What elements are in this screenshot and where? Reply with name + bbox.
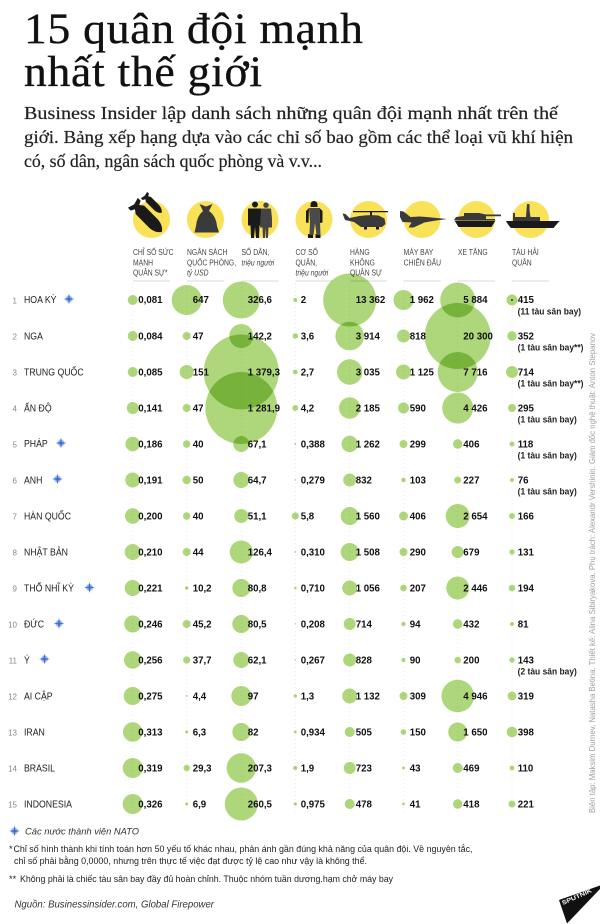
row 1: Hoa Kỳ: 647 <box>193 295 209 306</box>
column headers <box>133 246 539 278</box>
row 12: Ai Cập: 319 <box>518 692 534 702</box>
row 5: Pháp: 299 <box>410 440 426 450</box>
row 12: Ai Cập: 12 <box>8 692 18 702</box>
row 12: Ai Cập: 0,275 <box>138 692 163 702</box>
column headers: NGÂN SÁCH <box>187 247 227 257</box>
row 14: Brasil: 110 <box>518 764 533 774</box>
row 12: Ai Cập: 1,3 <box>301 692 315 702</box>
row 6: Anh: (1 tàu sân bay) <box>518 486 577 497</box>
column headers: QUỐC PHÒNG, <box>187 257 236 268</box>
row 11: Ý: 37,7 <box>193 656 212 666</box>
row 1: Hoa Kỳ: HOA KỲ <box>24 294 57 306</box>
row 11: Ý: 11 <box>9 656 18 666</box>
column headers: MẠNH <box>133 258 153 268</box>
row 4: Ấn Độ: 4,2 <box>301 404 314 414</box>
row 9: Thổ Nhĩ Kỳ: 194 <box>518 584 534 594</box>
row 8: Nhật Bản: 0,210 <box>138 548 163 558</box>
row 12: Ai Cập: 309 <box>410 692 426 702</box>
row 10: Đức: 10 <box>8 620 18 630</box>
column headers: triệu người <box>296 268 328 278</box>
row 10: Đức: 0,246 <box>138 620 163 630</box>
row 1: Hoa Kỳ: 0,081 <box>138 295 163 306</box>
row 12: Ai Cập: 1 132 <box>356 692 380 702</box>
column headers: HÀNG <box>350 247 370 257</box>
logo: Sputnik <box>559 886 600 924</box>
row 2: Nga: 818 <box>410 332 426 342</box>
row 14: Brasil <box>8 753 533 783</box>
row 15: Indonesia: 260,5 <box>248 800 273 810</box>
row 2: Nga: 20 300 <box>463 332 493 342</box>
footnote 1: chỉ số phải bằng 0,0000, nhưng trên thực tế việc đạt được tỷ lệ cao như vậy là không thể. <box>14 856 367 866</box>
row 6: Anh: 227 <box>463 476 479 486</box>
row 6: Anh: 103 <box>410 476 426 486</box>
row 7: Hàn Quốc: 406 <box>410 512 426 522</box>
row 3: Trung Quốc: 1 379,3 <box>248 368 281 378</box>
row 14: Brasil: 469 <box>463 764 480 774</box>
column headers: QUÂN SỰ* <box>133 268 168 278</box>
row 7: Hàn Quốc: HÀN QUỐC <box>24 510 71 523</box>
row 3: Trung Quốc: TRUNG QUỐC <box>24 366 84 379</box>
row 13: Iran: 0,934 <box>301 728 326 738</box>
row 7: Hàn Quốc: 51,1 <box>248 512 267 522</box>
row 1: Hoa Kỳ: 415 <box>518 295 534 306</box>
row 6: Anh: 0,279 <box>301 476 326 486</box>
row 8: Nhật Bản: 679 <box>463 548 480 558</box>
column headers: CƠ SỐ <box>296 246 318 257</box>
row 10: Đức: 0,208 <box>301 620 326 630</box>
row 1: Hoa Kỳ: (11 tàu sân bay) <box>518 306 581 317</box>
row 4: Ấn Độ: 4 <box>13 404 18 414</box>
row 5: Pháp: 1 262 <box>356 440 380 450</box>
row 10: Đức: ĐỨC <box>24 619 44 631</box>
column headers: CHIẾN ĐẤU <box>404 257 441 268</box>
row 11: Ý: 0,267 <box>301 656 325 666</box>
row 11: Ý: 62,1 <box>248 656 267 666</box>
row 13: Iran: 398 <box>518 728 534 738</box>
row 10: Đức: 80,5 <box>248 620 267 630</box>
row 13: Iran <box>8 722 534 742</box>
row 2: Nga: 47 <box>193 332 203 342</box>
source: Nguồn: Businessinsider.com, Global Firepower <box>14 898 214 910</box>
row 7: Hàn Quốc: 166 <box>518 512 534 522</box>
column headers: KHÔNG <box>350 258 375 268</box>
row 15: Indonesia: 0,326 <box>138 800 163 810</box>
logo: Sputnik: SPUTNIK <box>561 888 594 907</box>
row 6: Anh: 64,7 <box>248 476 267 486</box>
row 9: Thổ Nhĩ Kỳ: 207 <box>410 584 426 594</box>
footnote 1: Chỉ số hình thành khi tính toán hơn 50 yếu tố khác nhau, phản ánh gần đúng khả năng của quân đội. Về nguyên tắc, <box>14 844 472 854</box>
row 5: Pháp: 0,388 <box>301 440 326 450</box>
intro text: có, số dân, ngân sách quốc phòng và v.v... <box>24 151 322 171</box>
row 7: Hàn Quốc: 5,8 <box>301 512 315 522</box>
row 3: Trung Quốc: 151 <box>193 368 209 378</box>
credits: Biên tập: Maksim Durnev, Natasha Betina. Thiết kế: Alina Sibiryakova. Phụ trách: Alexandr Vershinin. Giám đốc nghệ thuật: Anton Stepanov <box>587 332 597 813</box>
row 9: Thổ Nhĩ Kỳ: 0,710 <box>301 584 325 594</box>
row 14: Brasil: 0,319 <box>138 764 163 774</box>
row 11: Ý: 828 <box>356 656 372 666</box>
row 9: Thổ Nhĩ Kỳ: 2 446 <box>463 584 488 594</box>
row 10: Đức: 94 <box>410 620 421 630</box>
row 11: Ý: 143 <box>518 656 534 666</box>
row 11: Ý: 200 <box>463 656 479 666</box>
row 3: Trung Quốc: 714 <box>518 368 534 378</box>
row 14: Brasil: 1,9 <box>301 764 315 774</box>
row 15: Indonesia: 0,975 <box>301 800 326 810</box>
row 3: Trung Quốc: 3 035 <box>356 368 381 378</box>
row 15: Indonesia: 15 <box>8 800 18 810</box>
row 6: Anh: 6 <box>13 476 18 486</box>
row 12: Ai Cập <box>8 680 534 712</box>
row 13: Iran: 505 <box>356 728 372 738</box>
row 13: Iran: 13 <box>8 728 18 738</box>
footnote 2: Không phải là chiếc tàu sân bay đầy đủ hoàn chỉnh. Thuộc nhóm tuần dương.hạm chở máy bay <box>20 874 393 884</box>
icon: soldier <box>296 201 332 238</box>
row 1: Hoa Kỳ: 1 962 <box>410 295 434 306</box>
row 2: Nga: 142,2 <box>248 332 272 342</box>
row 6: Anh: 50 <box>193 476 203 486</box>
column headers: tỷ USD <box>187 268 209 278</box>
title: 15 quân đội mạnh <box>24 5 364 53</box>
row 7: Hàn Quốc <box>13 504 534 528</box>
row 6: Anh: 832 <box>356 476 372 486</box>
row 10: Đức: 45,2 <box>193 620 212 630</box>
row 15: Indonesia: 418 <box>463 800 480 810</box>
column headers: QUÂN, <box>296 258 317 268</box>
row 4: Ấn Độ: 4 426 <box>463 404 488 414</box>
row 15: Indonesia: 41 <box>410 800 421 810</box>
row 14: Brasil: 14 <box>8 764 18 774</box>
row 5: Pháp: 406 <box>463 440 480 450</box>
row 8: Nhật Bản: 8 <box>13 548 18 558</box>
row 1: Hoa Kỳ: 326,6 <box>248 295 273 306</box>
row 2: Nga: 3 914 <box>356 332 381 342</box>
icon: helicopter <box>342 201 388 238</box>
icon: money bag <box>187 201 224 238</box>
intro text: giới. Bảng xếp hạng dựa vào các chỉ số bao gồm các thể loại vũ khí hiện <box>24 127 573 147</box>
row 8: Nhật Bản <box>13 540 534 564</box>
row 11: Ý: Ý <box>24 655 30 667</box>
row 2: Nga: NGA <box>24 331 43 343</box>
row 13: Iran: 6,3 <box>193 728 207 738</box>
row 5: Pháp: (1 tàu sân bay) <box>518 450 577 461</box>
column headers: SỐ DÂN, <box>241 246 269 257</box>
row 2: Nga: (1 tàu sân bay**) <box>518 342 583 353</box>
row 14: Brasil: 43 <box>410 764 421 774</box>
icon: jet <box>400 201 447 238</box>
icon: ship <box>506 201 560 238</box>
row 3: Trung Quốc: 7 716 <box>463 368 488 378</box>
row 13: Iran: IRAN <box>24 727 45 739</box>
row 10: Đức: 714 <box>356 620 372 630</box>
row 5: Pháp: 40 <box>193 440 203 450</box>
row 11: Ý: 90 <box>410 656 420 666</box>
icon: tank <box>454 201 501 238</box>
row 7: Hàn Quốc: 1 560 <box>356 512 380 522</box>
footnote 1: * <box>9 844 13 854</box>
row 3: Trung Quốc: 2,7 <box>301 368 314 378</box>
row 13: Iran: 1 650 <box>463 728 488 738</box>
column headers: QUÂN <box>512 258 532 268</box>
row 8: Nhật Bản: 44 <box>193 548 204 558</box>
row 6: Anh: ANH <box>24 475 42 487</box>
column headers: MÁY BAY <box>404 247 433 257</box>
row 15: Indonesia: 478 <box>356 800 372 810</box>
row 6: Anh: 0,191 <box>138 476 163 486</box>
row 3: Trung Quốc: 0,085 <box>138 368 163 378</box>
row 9: Thổ Nhĩ Kỳ: 9 <box>13 584 18 594</box>
column headers: QUÂN SỰ <box>350 268 382 278</box>
intro text <box>24 103 573 171</box>
row 1: Hoa Kỳ: 2 <box>301 295 306 306</box>
row 8: Nhật Bản: 0,310 <box>301 548 325 558</box>
row 4: Ấn Độ: 590 <box>410 404 426 414</box>
row 10: Đức: 432 <box>463 620 479 630</box>
row 4: Ấn Độ: 47 <box>193 404 203 414</box>
row 6: Anh: 76 <box>518 476 529 486</box>
row 7: Hàn Quốc: 0,200 <box>138 512 163 522</box>
row 9: Thổ Nhĩ Kỳ: 80,8 <box>248 584 267 594</box>
row 1: Hoa Kỳ <box>13 274 581 326</box>
row 8: Nhật Bản: 290 <box>410 548 426 558</box>
icon: bombs <box>128 192 170 238</box>
footnote 1 <box>9 844 472 866</box>
row 8: Nhật Bản: 131 <box>518 548 534 558</box>
row 8: Nhật Bản: 1 508 <box>356 548 381 558</box>
row 5: Pháp <box>13 436 577 461</box>
row 11: Ý: 0,256 <box>138 656 163 666</box>
intro text: Business Insider lập danh sách những quân đội mạnh nhất trên thế <box>24 103 559 123</box>
row 2: Nga: 0,084 <box>138 332 163 342</box>
row 14: Brasil: 723 <box>356 764 372 774</box>
row 3: Trung Quốc <box>13 334 583 410</box>
row 9: Thổ Nhĩ Kỳ: 0,221 <box>138 584 163 594</box>
row 4: Ấn Độ: (1 tàu sân bay) <box>518 414 577 425</box>
column headers: triệu người <box>241 258 274 268</box>
row 4: Ấn Độ: 2 185 <box>356 404 381 414</box>
row 2: Nga: 352 <box>518 332 534 342</box>
row 10: Đức <box>8 615 529 633</box>
row 12: Ai Cập: 4,4 <box>193 692 207 702</box>
row 13: Iran: 150 <box>410 728 426 738</box>
row 4: Ấn Độ: 0,141 <box>138 404 163 414</box>
row 14: Brasil: 29,3 <box>193 764 212 774</box>
row 4: Ấn Độ: 295 <box>518 404 534 414</box>
row 2: Nga: 3,6 <box>301 332 315 342</box>
row 4: Ấn Độ <box>13 372 577 444</box>
row 12: Ai Cập: 4 946 <box>463 692 488 702</box>
column headers: XE TĂNG <box>458 247 488 257</box>
row 5: Pháp: PHÁP <box>24 438 48 450</box>
row 1: Hoa Kỳ: 5 884 <box>463 295 488 306</box>
row 7: Hàn Quốc: 7 <box>13 512 18 522</box>
row 10: Đức: 81 <box>518 620 529 630</box>
row 5: Pháp: 5 <box>13 440 18 450</box>
row 15: Indonesia: 6,9 <box>193 800 207 810</box>
column headers: TÀU HẢI <box>512 247 539 257</box>
row 9: Thổ Nhĩ Kỳ: 1 056 <box>356 584 381 594</box>
row 12: Ai Cập: AI CẬP <box>24 691 53 703</box>
footnote 2: ** <box>9 874 17 884</box>
row 3: Trung Quốc: 3 <box>13 368 18 378</box>
row 15: Indonesia: INDONESIA <box>24 799 73 811</box>
row 15: Indonesia: 221 <box>518 800 534 810</box>
row 1: Hoa Kỳ: 13 362 <box>356 295 385 306</box>
row 9: Thổ Nhĩ Kỳ: THỔ NHĨ KỲ <box>24 582 74 595</box>
row 3: Trung Quốc: (1 tàu sân bay**) <box>518 378 583 389</box>
row 1: Hoa Kỳ: 1 <box>13 296 18 306</box>
icon: people <box>242 201 278 238</box>
row 2: Nga: 2 <box>13 332 18 342</box>
row 8: Nhật Bản: NHẬT BẢN <box>24 546 68 559</box>
row 14: Brasil: 207,3 <box>248 764 273 774</box>
row 9: Thổ Nhĩ Kỳ: 10,2 <box>193 584 212 594</box>
legend: NATO members: Các nước thành viên NATO <box>25 826 140 838</box>
row 3: Trung Quốc: 1 125 <box>410 368 435 378</box>
row 11: Ý <box>9 651 577 677</box>
row 5: Pháp: 0,186 <box>138 440 163 450</box>
row 5: Pháp: 67,1 <box>248 440 267 450</box>
row 8: Nhật Bản: 126,4 <box>248 548 273 558</box>
row 13: Iran: 82 <box>248 728 258 738</box>
row 11: Ý: (2 tàu sân bay) <box>518 666 577 677</box>
row 5: Pháp: 118 <box>518 440 534 450</box>
row 4: Ấn Độ: ẤN ĐỘ <box>24 402 52 415</box>
row 15: Indonesia <box>8 788 534 820</box>
row 12: Ai Cập: 97 <box>248 692 258 702</box>
title <box>24 5 364 96</box>
column headers: CHỈ SỐ SỨC <box>133 246 174 257</box>
title: nhất thế giới <box>24 48 263 96</box>
row 2: Nga <box>13 303 583 369</box>
row 14: Brasil: BRASIL <box>24 763 56 775</box>
row 9: Thổ Nhĩ Kỳ <box>13 576 534 600</box>
row 6: Anh <box>13 472 577 497</box>
row 13: Iran: 0,313 <box>138 728 163 738</box>
row 7: Hàn Quốc: 2 654 <box>463 512 488 522</box>
row 4: Ấn Độ: 1 281,9 <box>248 404 281 414</box>
row 7: Hàn Quốc: 40 <box>193 512 203 522</box>
